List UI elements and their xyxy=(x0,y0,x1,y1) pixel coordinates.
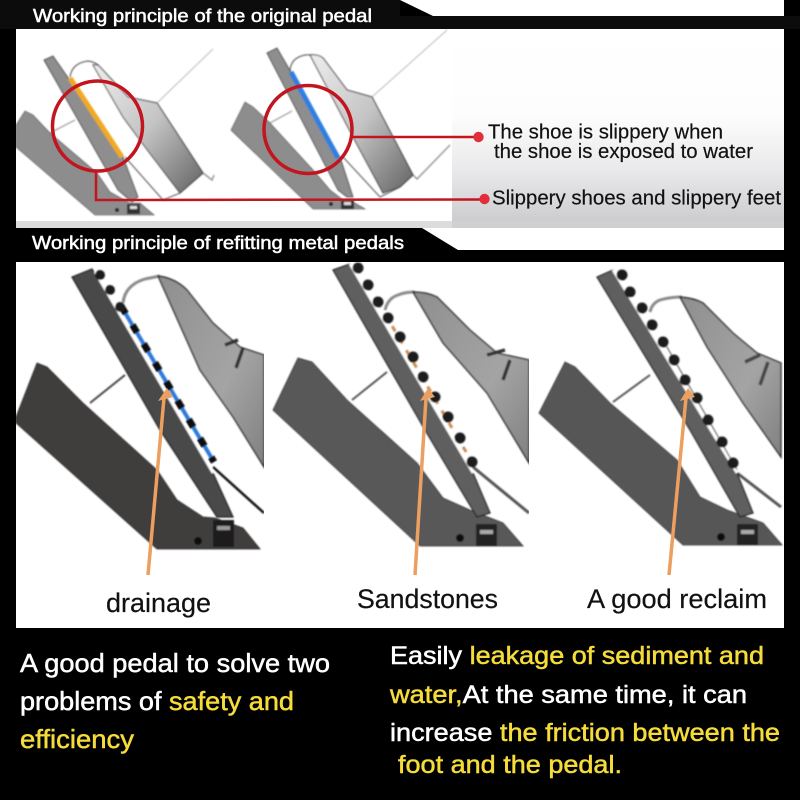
top header band xyxy=(0,0,800,29)
text block: leakage and friction: foot and the pedal. xyxy=(398,751,622,779)
callout: water slip xyxy=(488,122,753,163)
callout: slippery feet: Slippery shoes and slippery feet xyxy=(492,188,781,210)
red callout circles and leader lines xyxy=(52,81,484,200)
second header band xyxy=(0,228,800,262)
text block: safety and efficiency xyxy=(20,648,330,754)
text block: leakage and friction: Easily leakage of sediment and xyxy=(390,642,764,670)
text block: safety and efficiency: problems of safety and xyxy=(20,686,294,716)
panel: metal pedals xyxy=(16,262,784,628)
pedal: sandstones xyxy=(273,262,529,614)
arrow xyxy=(415,388,435,575)
callout dots xyxy=(473,132,490,204)
original pedal illustration: orange xyxy=(16,49,214,215)
callout: water slip: The shoe is slippery when xyxy=(488,122,723,144)
pedal: good reclaim xyxy=(539,270,782,614)
label: A good reclaim xyxy=(587,584,767,614)
text block: leakage and friction xyxy=(389,642,780,779)
label: Sandstones xyxy=(357,584,498,614)
pedal: drainage xyxy=(16,269,264,618)
arrow xyxy=(148,388,173,575)
text block: leakage and friction: increase the friction between the xyxy=(390,719,780,747)
arrow xyxy=(669,388,695,575)
heading: refitting metal pedals: Working principle of refitting metal pedals xyxy=(32,233,404,253)
callout: water slip: the shoe is exposed to water xyxy=(494,141,753,163)
original pedal illustration: blue xyxy=(231,30,450,209)
text block: safety and efficiency: efficiency xyxy=(20,724,134,754)
panel: original pedal xyxy=(16,29,784,228)
heading: original pedal: Working principle of the original pedal xyxy=(33,6,372,26)
label: drainage xyxy=(106,588,211,618)
text block: safety and efficiency: A good pedal to solve two xyxy=(20,648,330,678)
text block: leakage and friction: water,At the same time, it can xyxy=(389,681,747,709)
